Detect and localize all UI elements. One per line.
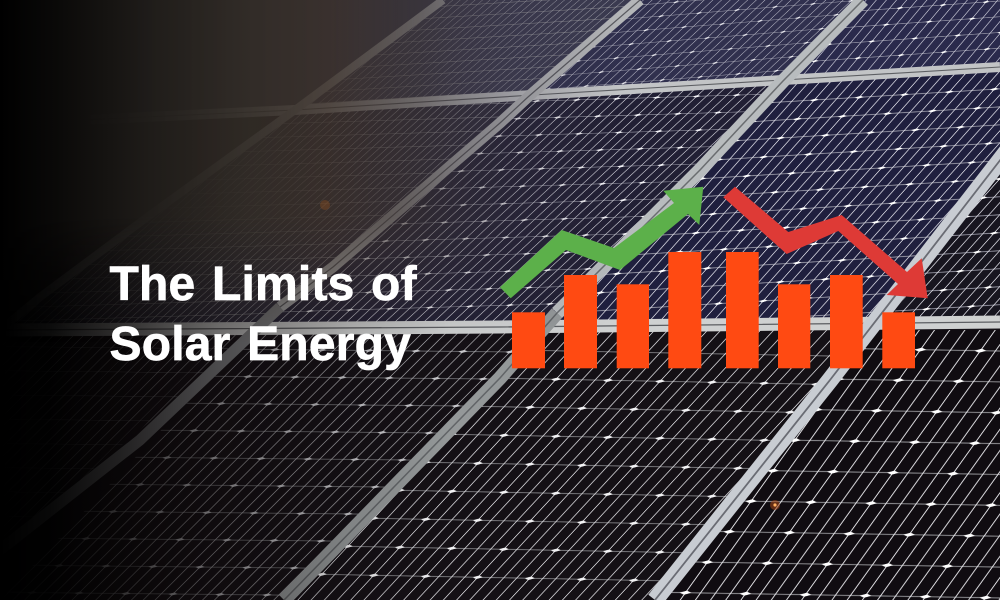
panels: lower row [0,330,1000,600]
title: The Limits of [110,258,418,311]
warm brown haze overlay [54,0,604,333]
lens flare specks [320,200,780,510]
panels: middle row [0,67,1000,327]
arrow: green rising [500,187,703,298]
arrow: red falling [723,187,928,298]
panels: top row [0,0,1000,125]
title: Solar Energy [110,318,411,371]
bar chart [512,252,915,368]
title [110,258,418,371]
